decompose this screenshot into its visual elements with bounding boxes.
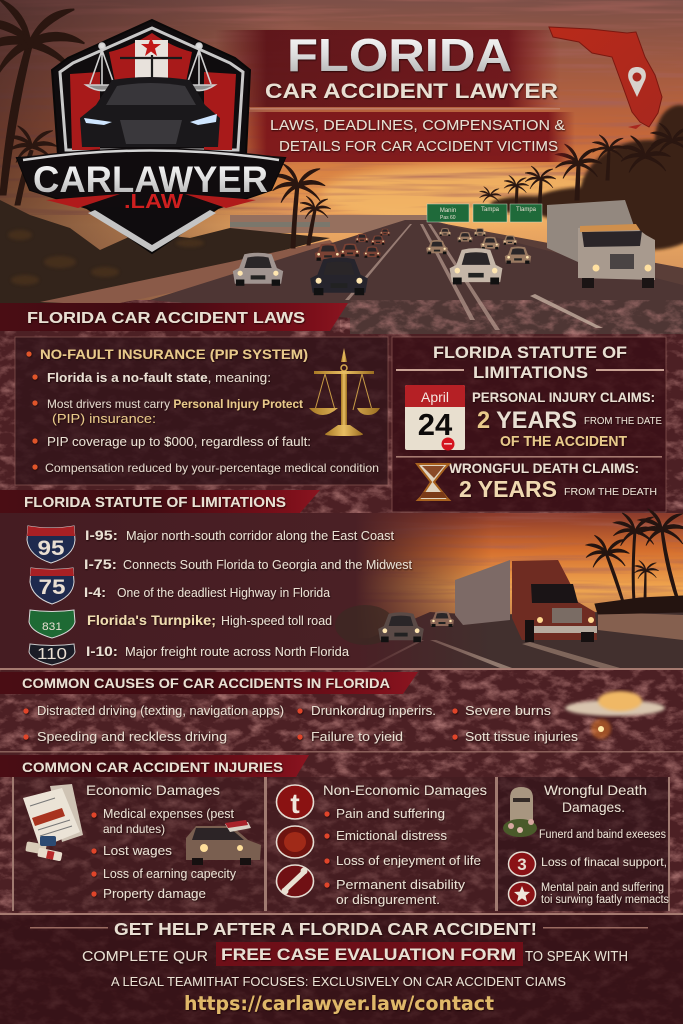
icon: star badge [508, 882, 536, 906]
panel: statute of limitations deadlines: FROM THE DATE [584, 416, 662, 427]
icon: Turnpike shield [29, 610, 75, 638]
green highway signs: Manin [440, 208, 456, 214]
call to action footer: COMPLETE QUR [82, 949, 208, 965]
icon: I-75 shield: 75 [38, 576, 66, 599]
logo: car front [80, 77, 220, 147]
section header: Florida car accident laws [0, 303, 348, 331]
panel: wrongful death damages: Wrongful Death [544, 782, 647, 798]
title: Florida: FLORIDA [287, 29, 512, 81]
vegetation left [0, 200, 330, 304]
road [150, 220, 683, 334]
panel: economic damages: Lost wages [103, 843, 173, 858]
panel: non-economic damages: or disngurement. [336, 892, 440, 907]
icon: I-75 shield [30, 568, 74, 604]
panel: no-fault insurance: Compensation reduced by your-percentage medical condition [45, 461, 379, 475]
icon: I-95 shield [27, 526, 75, 563]
panel: statute of limitations deadlines: OF THE ACCIDENT [500, 433, 627, 450]
call to action footer: TO SPEAK WITH [525, 949, 628, 965]
panel: statute of limitations deadlines: FROM THE DEATH [564, 487, 657, 498]
highway list: I-4: [84, 584, 106, 600]
panel: no-fault insurance: Florida is a no-fault state , meaning: [47, 370, 271, 385]
common causes list: Severe burns [465, 703, 552, 718]
icon: calendar: 24 [418, 407, 453, 442]
icon: broken bone circle [276, 865, 314, 897]
panel: economic damages [12, 777, 267, 911]
common causes list: Sott tissue injuries [465, 729, 579, 744]
section header: Florida car accident laws: FLORIDA CAR ACCIDENT LAWS [27, 310, 305, 327]
highway list: Connects South Florida to Georgia and the Midwest [123, 558, 413, 572]
title banner [215, 29, 575, 162]
panel: economic damages: Economic Damages [86, 782, 220, 798]
common causes list [23, 703, 579, 744]
icon: crash smoke and sparks [565, 691, 665, 739]
panel: economic damages: and ndutes) [103, 822, 165, 836]
icon: pain circle: t [290, 788, 300, 819]
common causes list: Failure to yieid [311, 729, 403, 744]
highway list: Major freight route across North Florida [125, 645, 349, 659]
call to action footer: FREE CASE EVALUATION FORM [221, 945, 516, 964]
call to action footer: https://carlawyer.law/contact [184, 992, 494, 1015]
section header: common causes [0, 668, 683, 694]
panel: wrongful death damages: Loss of finacal support, [541, 855, 667, 869]
low wall [40, 240, 336, 305]
panel: non-economic damages [267, 777, 498, 911]
panel: economic damages: Loss of earning capecity [103, 866, 236, 881]
icon: gravestone with flowers [503, 787, 537, 837]
panel: wrongful death damages: Funerd and baind exeeses [539, 829, 666, 841]
panel: statute of limitations deadlines: FLORIDA STATUTE OF [433, 343, 627, 362]
section header: Florida statute of limitations: FLORIDA STATUTE OF LIMITATIONS [24, 495, 286, 511]
green highway signs: Pas 60 [440, 215, 456, 221]
logo: ribbon: .LAW [124, 191, 183, 213]
tagline: DETAILS FOR CAR ACCIDENT VICTIMS [279, 138, 558, 155]
panel: no-fault insurance: NO-FAULT INSURANCE (PIP SYSTEM) [40, 346, 308, 362]
call to action footer: A LEGAL TEAMITHAT FOCUSES: EXCLUSIVELY ON CAR ACCIDENT CIAMS [111, 974, 566, 989]
green highway signs: Tlampa [516, 207, 537, 213]
section header: common causes: COMMON CAUSES OF CAR ACCIDENTS IN FLORIDA [22, 675, 390, 691]
palms [0, 0, 683, 248]
vegetation right [490, 105, 683, 250]
truck [455, 560, 597, 642]
panel: statute of limitations deadlines: 2 YEARS [477, 407, 577, 434]
icon: hourglass [417, 464, 449, 500]
panel: statute of limitations deadlines: 2 YEARS [459, 476, 557, 502]
panel: non-economic damages: Permanent disability [336, 877, 466, 892]
icon: paperwork and bandages [23, 784, 83, 861]
panel: statute of limitations deadlines: WRONGFUL DEATH CLAIMS: [449, 460, 639, 476]
highway list: I-75: [84, 556, 117, 572]
panel: non-economic damages: Pain and suffering [336, 806, 445, 821]
section header: Florida statute of limitations [0, 490, 320, 513]
panel: no-fault insurance: PIP coverage up to $000, regardless of fault: [47, 434, 311, 449]
call to action footer: GET HELP AFTER A FLORIDA CAR ACCIDENT! [114, 919, 537, 939]
panel: statute of limitations deadlines: PERSONAL INJURY CLAIMS: [472, 389, 655, 405]
icon: distress circle [276, 826, 314, 858]
highway list: High-speed toll road [221, 614, 332, 628]
call to action footer [0, 913, 683, 1024]
logo: ribbon [17, 148, 285, 252]
icon: number three badge: 3 [517, 855, 527, 874]
common causes list: Distracted driving (texting, navigation apps) [37, 703, 284, 718]
highway list [27, 526, 413, 665]
panel: no-fault insurance: Most drivers must carry Personal Injury Protect [47, 397, 303, 411]
green highway signs [427, 204, 542, 222]
highway list: Florida's Turnpike; [87, 612, 216, 628]
hero: Florida highway at sunset [0, 0, 683, 334]
tagline: LAWS, DEADLINES, COMPENSATION & [270, 117, 565, 134]
Florida map with pin [549, 27, 662, 129]
panel: non-economic damages: Non-Economic Damages [323, 782, 487, 798]
highway list: I-10: [86, 643, 118, 659]
panel: no-fault insurance [15, 337, 388, 485]
panel: no-fault insurance: (PIP) insurance: [52, 411, 156, 426]
panel: economic damages: Property damage [103, 886, 206, 901]
icon: damaged car [186, 820, 261, 865]
highway list: I-95: [85, 527, 118, 543]
truck [547, 200, 655, 288]
section header: common injuries [0, 751, 683, 777]
icon: gold scales of justice [309, 348, 380, 436]
panel: wrongful death damages: Damages. [562, 799, 625, 815]
traffic [233, 228, 531, 295]
subtitle: Car Accident Lawyer: CAR ACCIDENT LAWYER [265, 79, 559, 103]
strip: highway sunset scene [0, 509, 683, 668]
panel: statute of limitations deadlines: LIMITATIONS [473, 363, 588, 382]
icon: number three badge [508, 852, 536, 876]
tagline [270, 117, 565, 155]
section header: common injuries: COMMON CAR ACCIDENT INJURIES [22, 759, 283, 775]
logo: scales [86, 43, 215, 90]
CarLawyer.law shield logo [17, 20, 285, 253]
logo: ribbon: CARLAWYER [33, 159, 268, 200]
highway list: One of the deadliest Highway in Florida [117, 586, 330, 600]
panel: non-economic damages: Emictional distress [336, 828, 448, 843]
icon: calendar [405, 385, 465, 450]
panel: statute of limitations deadlines [392, 337, 666, 512]
highway list: Major north-south corridor along the East Coast [126, 529, 395, 543]
water and far shore [230, 215, 430, 233]
panel: non-economic damages: Loss of enjeyment of life [336, 853, 481, 868]
panel: wrongful death damages: toi surwing faatly memacts [541, 894, 669, 906]
panel: economic damages: Medical expenses (pest [103, 806, 234, 821]
icon: I-10 shield [29, 644, 75, 665]
icon: calendar: April [421, 389, 449, 405]
common causes list: Speeding and reckless driving [37, 729, 227, 744]
palms [586, 509, 683, 614]
green highway signs: Tampa [481, 207, 500, 213]
logo: star [141, 37, 161, 56]
icon: Turnpike shield: 831 [42, 621, 62, 633]
icon: pain circle [276, 785, 314, 819]
panel: wrongful death damages: Mental pain and suffering [541, 882, 664, 894]
panel: wrongful death damages [498, 777, 670, 911]
common causes list: Drunkordrug inperirs. [311, 703, 436, 718]
icon: I-10 shield: 110 [37, 646, 67, 663]
icon: I-95 shield: 95 [38, 537, 65, 560]
